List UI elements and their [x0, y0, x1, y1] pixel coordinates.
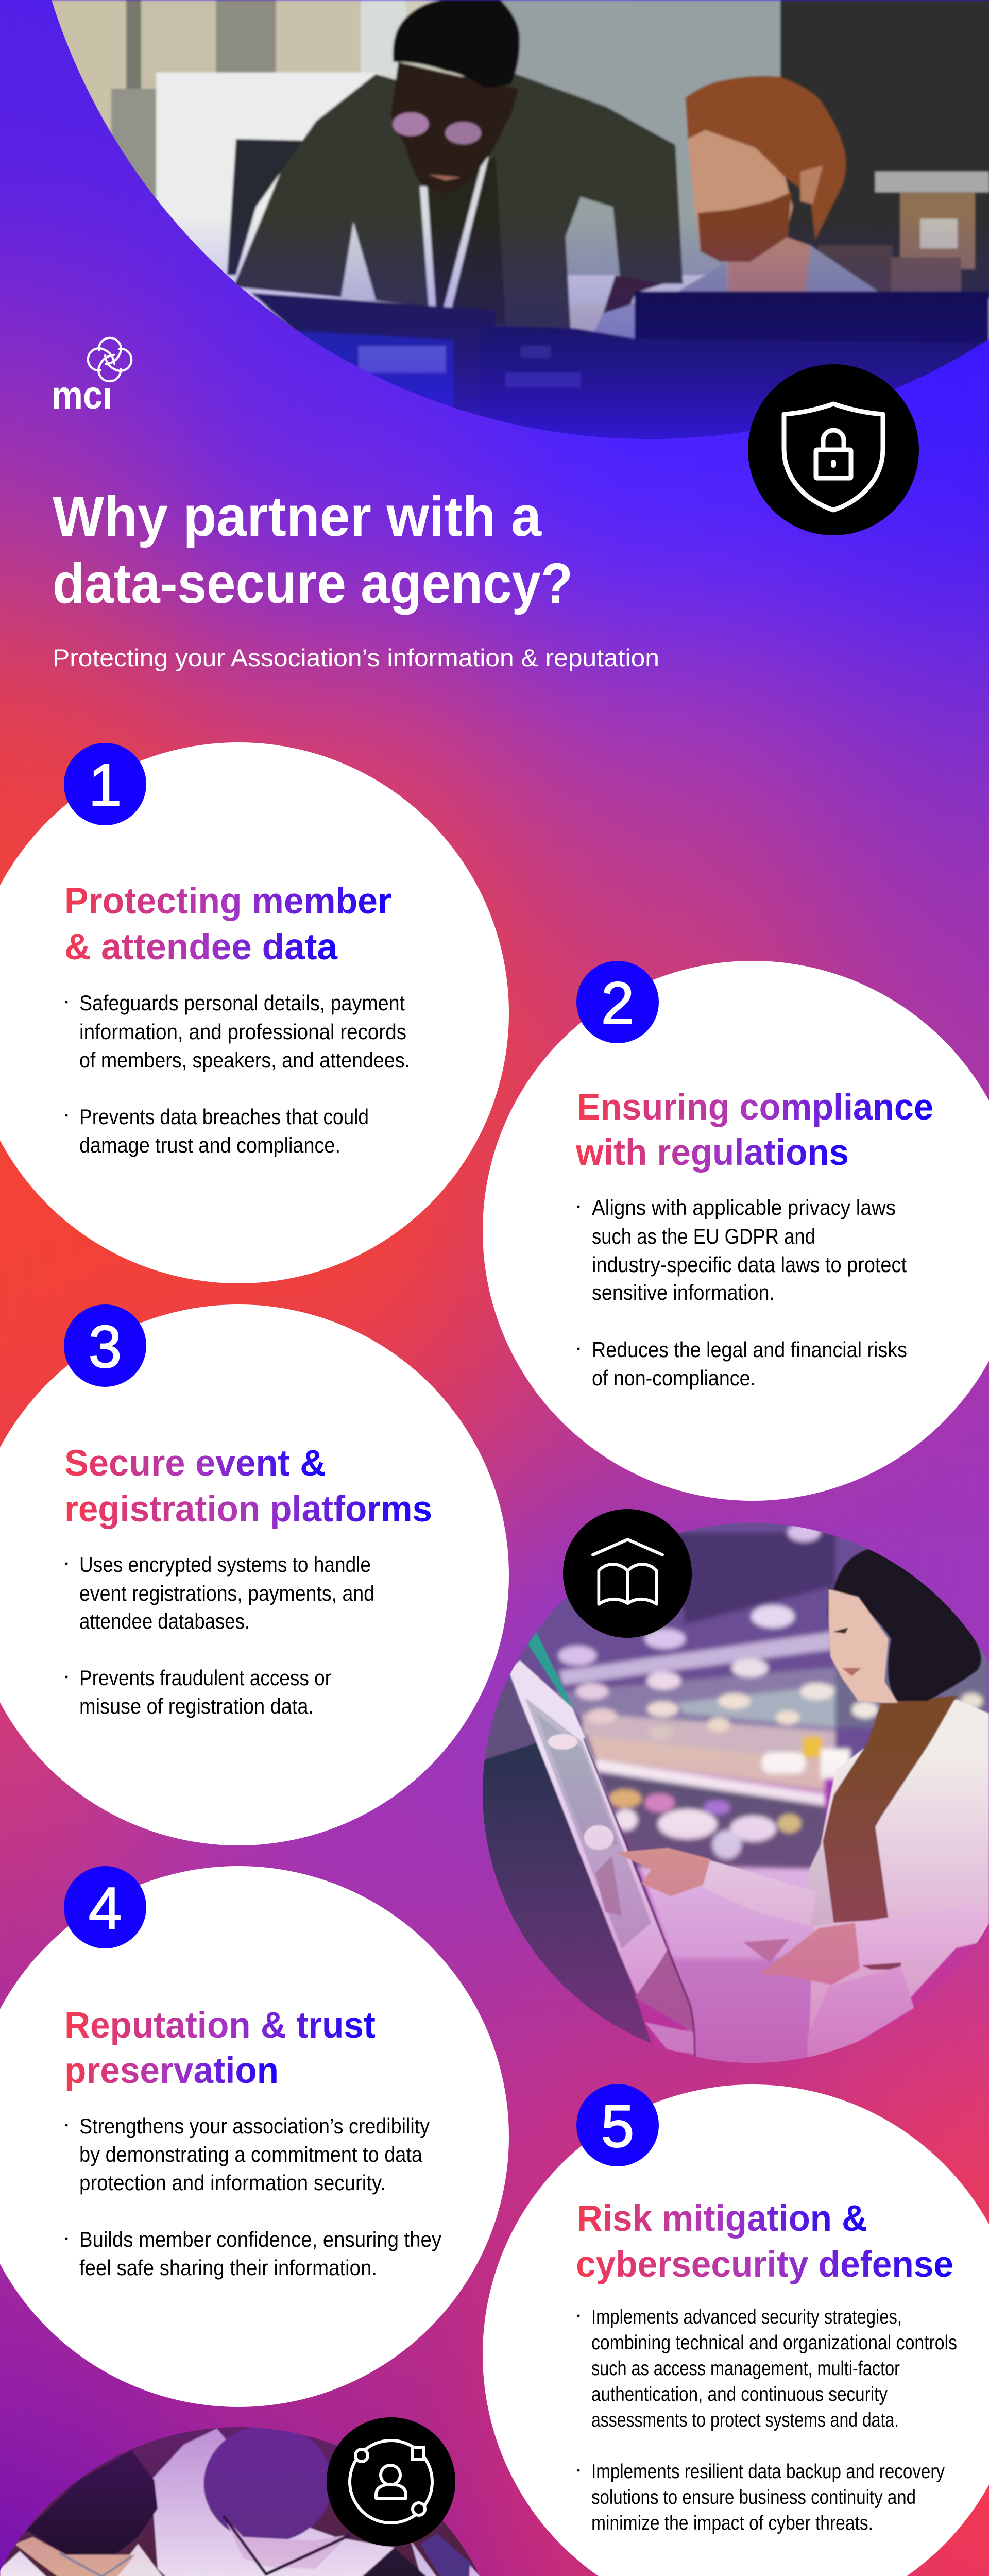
bullets 5: minimize the impact of cyber threats. — [591, 2512, 873, 2534]
logo: mci — [54, 337, 133, 409]
bullets 2 — [577, 1195, 907, 1390]
badge 4: 4 — [89, 1875, 122, 1942]
title — [53, 485, 573, 615]
bullets 5: authentication, and continuous security — [591, 2383, 888, 2405]
bullets 4: Builds member confidence, ensuring they — [79, 2227, 441, 2251]
panel 5: risk mitigation and cybersecurity defense — [483, 2084, 989, 2576]
bullets 1: of members, speakers, and attendees. — [79, 1048, 410, 1072]
photo: woman using kiosk — [474, 1515, 989, 2071]
heading 4 — [64, 2005, 376, 2091]
heading 5: cybersecurity defense — [576, 2244, 953, 2285]
bullets 5: assessments to protect systems and data. — [591, 2409, 899, 2431]
icon: person in orbit — [327, 2417, 455, 2546]
panel 4: reputation and trust preservation — [0, 1866, 509, 2407]
bullets 3: attendee databases. — [79, 1609, 250, 1633]
title: data-secure agency? — [53, 552, 573, 615]
heading 3: Secure event & — [64, 1443, 326, 1484]
panel 1: protecting member and attendee data — [0, 742, 509, 1283]
bullets 1: damage trust and compliance. — [79, 1133, 340, 1157]
heading 2: with regulations — [575, 1132, 849, 1173]
photo: two men reviewing charts — [0, 2416, 515, 2576]
subtitle: Protecting your Association’s information & reputation — [53, 644, 659, 671]
heading 3: registration platforms — [64, 1489, 432, 1530]
bullets 4 — [65, 2114, 441, 2280]
bullets 5: such as access management, multi-factor — [591, 2358, 900, 2380]
bullets 3: event registrations, payments, and — [79, 1581, 374, 1605]
badge 2: 2 — [601, 970, 634, 1037]
bullets 4: Strengthens your association’s credibility — [79, 2114, 430, 2138]
heading 1: & attendee data — [64, 927, 338, 968]
badge 3: 3 — [89, 1313, 122, 1380]
bullets 1: Safeguards personal details, payment — [79, 991, 405, 1015]
logo: mci: mci — [52, 374, 112, 417]
bullets 3: Prevents fraudulent access or — [79, 1666, 331, 1690]
bullets 3: Uses encrypted systems to handle — [79, 1552, 371, 1577]
bullets 1 — [65, 991, 410, 1157]
bullets 3: misuse of registration data. — [79, 1694, 314, 1718]
bullets 1: Prevents data breaches that could — [79, 1105, 369, 1129]
bullets 5: solutions to ensure business continuity and — [591, 2486, 916, 2509]
icon: book with roof — [563, 1509, 692, 1638]
panel 3: secure event and registration platforms — [0, 1304, 509, 1845]
heading 4: preservation — [64, 2050, 279, 2091]
bullets 1: information, and professional records — [79, 1020, 406, 1044]
heading 2: Ensuring compliance — [577, 1087, 933, 1128]
bullets 2: of non-compliance. — [592, 1366, 756, 1390]
badge 3 — [64, 1304, 146, 1387]
badge 5 — [576, 2084, 659, 2166]
badge 1: 1 — [89, 752, 122, 819]
bullets 2: sensitive information. — [592, 1280, 775, 1304]
heading 5: Risk mitigation & — [577, 2198, 867, 2239]
heading 4: Reputation & trust — [64, 2005, 376, 2046]
bullets 4: protection and information security. — [79, 2171, 386, 2195]
heading 2 — [575, 1087, 933, 1173]
title: Why partner with a — [53, 485, 542, 548]
badge 4 — [64, 1866, 146, 1948]
bullets 4: feel safe sharing their information. — [79, 2256, 377, 2280]
panel 2: ensuring compliance with regulations — [483, 961, 989, 1501]
bullets 2: industry-specific data laws to protect — [592, 1252, 907, 1277]
badge 2 — [576, 961, 659, 1043]
header photo: two colleagues at monitors — [0, 0, 989, 444]
icon: shield with padlock — [748, 364, 919, 535]
bullets 2: Aligns with applicable privacy laws — [592, 1195, 896, 1219]
heading 1: Protecting member — [64, 881, 391, 922]
heading 1 — [64, 881, 391, 968]
bullets 3 — [65, 1552, 374, 1718]
heading 5 — [576, 2198, 953, 2285]
heading 3 — [64, 1443, 432, 1530]
badge 1 — [64, 743, 146, 825]
badge 5: 5 — [601, 2093, 634, 2160]
bullets 5: Implements advanced security strategies, — [591, 2306, 902, 2328]
bullets 5 — [577, 2306, 957, 2534]
bullets 2: such as the EU GDPR and — [592, 1224, 815, 1248]
bullets 2: Reduces the legal and financial risks — [592, 1337, 907, 1362]
bullets 4: by demonstrating a commitment to data — [79, 2142, 423, 2166]
